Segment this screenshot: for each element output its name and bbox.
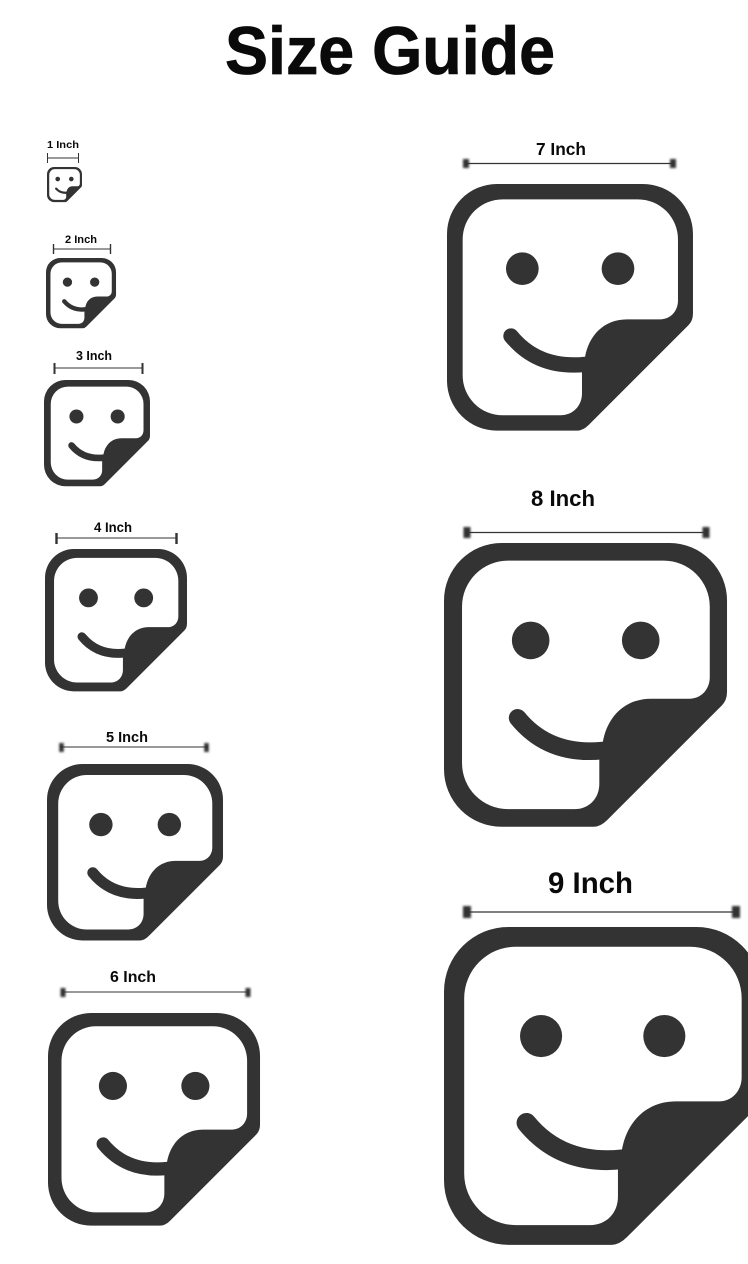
icon: 2 inch sticker xyxy=(46,258,116,328)
ruler: 6 inch xyxy=(62,988,249,997)
sticker size: 9 inch xyxy=(444,867,748,1245)
ruler: 3 inch xyxy=(54,363,143,374)
ruler: 8 inch xyxy=(467,527,707,538)
sticker size: 5 inch xyxy=(47,730,223,940)
icon: 6 inch sticker xyxy=(48,1013,260,1226)
sticker size: 7 inch xyxy=(447,139,693,431)
sticker size: 8 inch xyxy=(444,486,727,827)
label: 1 inch: 1 Inch xyxy=(47,139,79,151)
icon: 4 inch sticker xyxy=(45,549,187,691)
ruler: 9 inch xyxy=(467,906,736,918)
label: 7 inch: 7 Inch xyxy=(536,139,586,159)
label: 6 inch: 6 Inch xyxy=(110,969,156,986)
label: 9 inch: 9 Inch xyxy=(548,867,633,900)
sticker size: 1 inch xyxy=(47,139,82,202)
ruler: 4 inch xyxy=(56,533,177,544)
sticker size: 2 inch xyxy=(46,234,116,328)
ruler: 2 inch xyxy=(53,244,111,254)
icon: 9 inch sticker xyxy=(444,927,748,1245)
icon: 1 inch sticker xyxy=(47,167,82,202)
icon: 7 inch sticker xyxy=(447,184,693,431)
icon: 5 inch sticker xyxy=(47,764,223,940)
icon: 3 inch sticker xyxy=(44,380,150,486)
label: 4 inch: 4 Inch xyxy=(94,520,132,535)
sticker size: 4 inch xyxy=(45,520,187,691)
ruler: 1 inch xyxy=(47,153,79,163)
sticker size: 3 inch xyxy=(44,349,150,486)
label: 8 inch: 8 Inch xyxy=(531,486,595,511)
ruler: 7 inch xyxy=(466,159,673,168)
label: 3 inch: 3 Inch xyxy=(76,349,112,363)
ruler: 5 inch xyxy=(60,743,208,752)
label: 2 inch: 2 Inch xyxy=(65,234,97,246)
title: Size Guide xyxy=(225,13,555,89)
icon: 8 inch sticker xyxy=(444,543,727,827)
label: 5 inch: 5 Inch xyxy=(106,730,148,746)
sticker size: 6 inch xyxy=(48,969,260,1226)
